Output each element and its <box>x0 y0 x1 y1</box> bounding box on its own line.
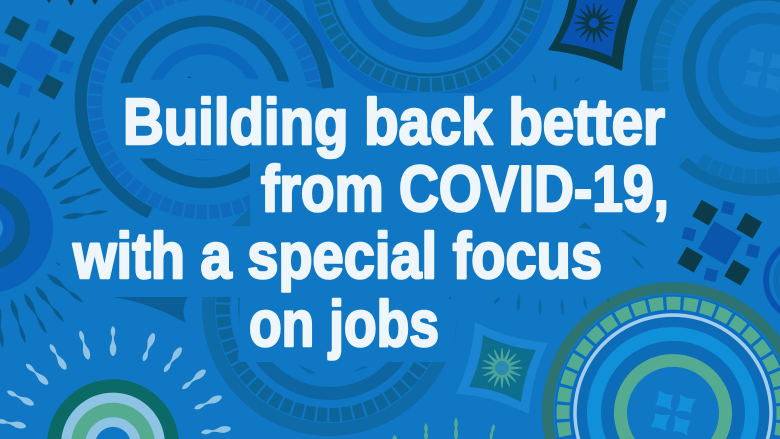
circle: bottom right <box>542 282 780 439</box>
circle: bottom centre <box>208 186 452 430</box>
green rays at bottom edge <box>392 417 495 439</box>
tile cluster: top left <box>0 16 75 100</box>
title: on jobs <box>249 287 439 360</box>
title: from COVID-19, <box>261 152 669 225</box>
fragment of diamond <box>113 297 188 323</box>
faint rays around lower diamond and right of text <box>449 73 647 316</box>
circle: left edge <box>0 163 53 293</box>
circle: top centre <box>305 0 551 98</box>
tile cluster: right <box>677 200 762 286</box>
circle: far right edge <box>766 240 780 320</box>
title: Building back better <box>123 85 665 158</box>
diamond: top with sunburst <box>548 0 640 71</box>
light rays around bottom left circle <box>0 326 231 436</box>
small dark sun rays at top left edge <box>47 0 98 6</box>
dark rays around left circle <box>0 110 108 348</box>
diamond: lower with sunburst <box>456 322 548 414</box>
title: with a special focus <box>72 219 602 292</box>
title <box>72 85 669 360</box>
text backdrop cloud <box>66 77 694 362</box>
circle: top left <box>81 0 328 213</box>
circle: top right <box>646 0 780 190</box>
circle: bottom left <box>47 379 179 439</box>
